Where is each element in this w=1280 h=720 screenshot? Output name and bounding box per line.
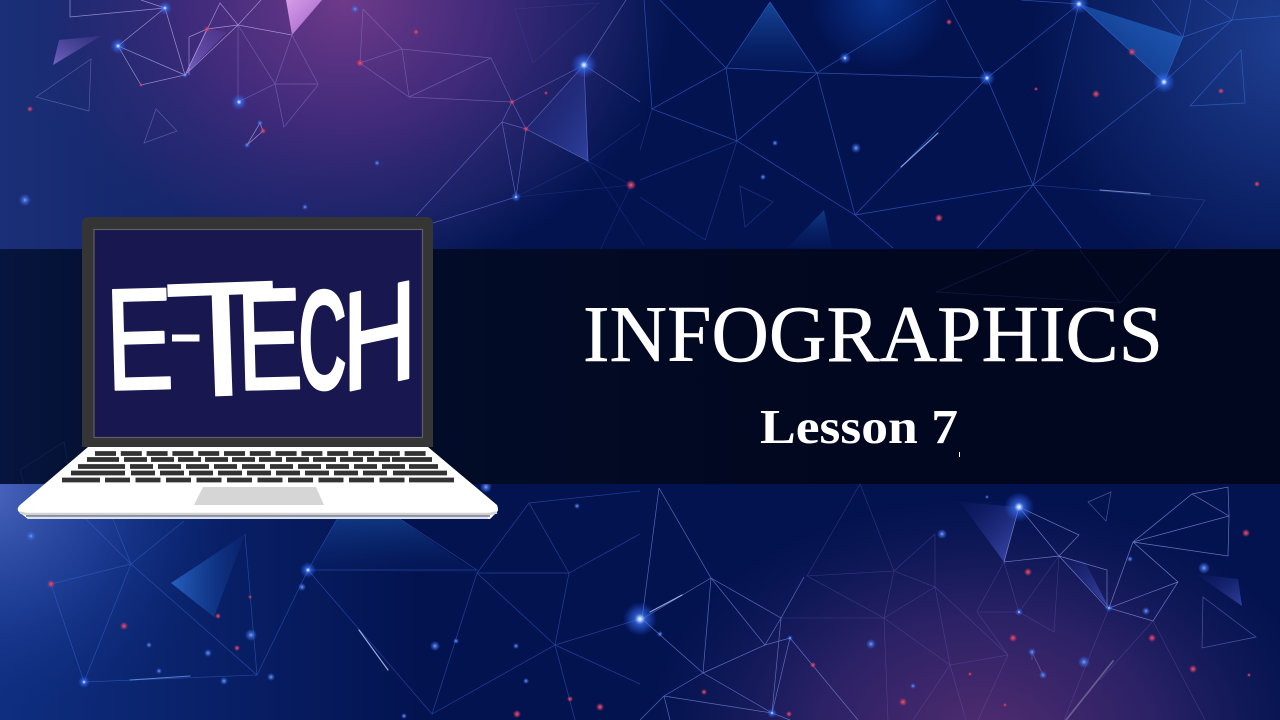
laptop screen <box>94 230 422 438</box>
e-tech wordmark: - <box>167 281 204 381</box>
bright streaks <box>130 133 1150 720</box>
title: INFOGRAPHICS <box>583 291 1163 379</box>
network triangles <box>53 0 1242 617</box>
e-tech wordmark: E <box>104 257 175 421</box>
network lines: mid top <box>416 0 640 223</box>
cursor mark <box>959 452 960 457</box>
e-tech wordmark: T <box>162 246 282 434</box>
network lines: faint purple <box>781 484 1205 720</box>
dark title band <box>0 249 1280 484</box>
laptop illustration <box>18 217 498 519</box>
network lines: top left <box>70 0 292 145</box>
network lines: bottom left <box>51 491 640 720</box>
e-tech wordmark: E <box>235 259 305 422</box>
network lines: bottom centre <box>640 488 858 720</box>
e-tech wordmark: H <box>342 251 417 422</box>
network lines: top right <box>644 0 1280 248</box>
laptop lid <box>82 217 433 447</box>
base front edge <box>20 512 497 518</box>
laptop base <box>18 447 498 519</box>
network lines: faint top left <box>36 9 512 143</box>
network lines: bottom right <box>1004 487 1256 675</box>
trackpad <box>194 487 324 505</box>
faint lines over band <box>20 250 1170 488</box>
subtitle: Lesson 7 <box>760 399 958 454</box>
keyboard <box>62 454 454 480</box>
e-tech wordmark <box>104 246 417 434</box>
e-tech wordmark: C <box>298 259 347 422</box>
